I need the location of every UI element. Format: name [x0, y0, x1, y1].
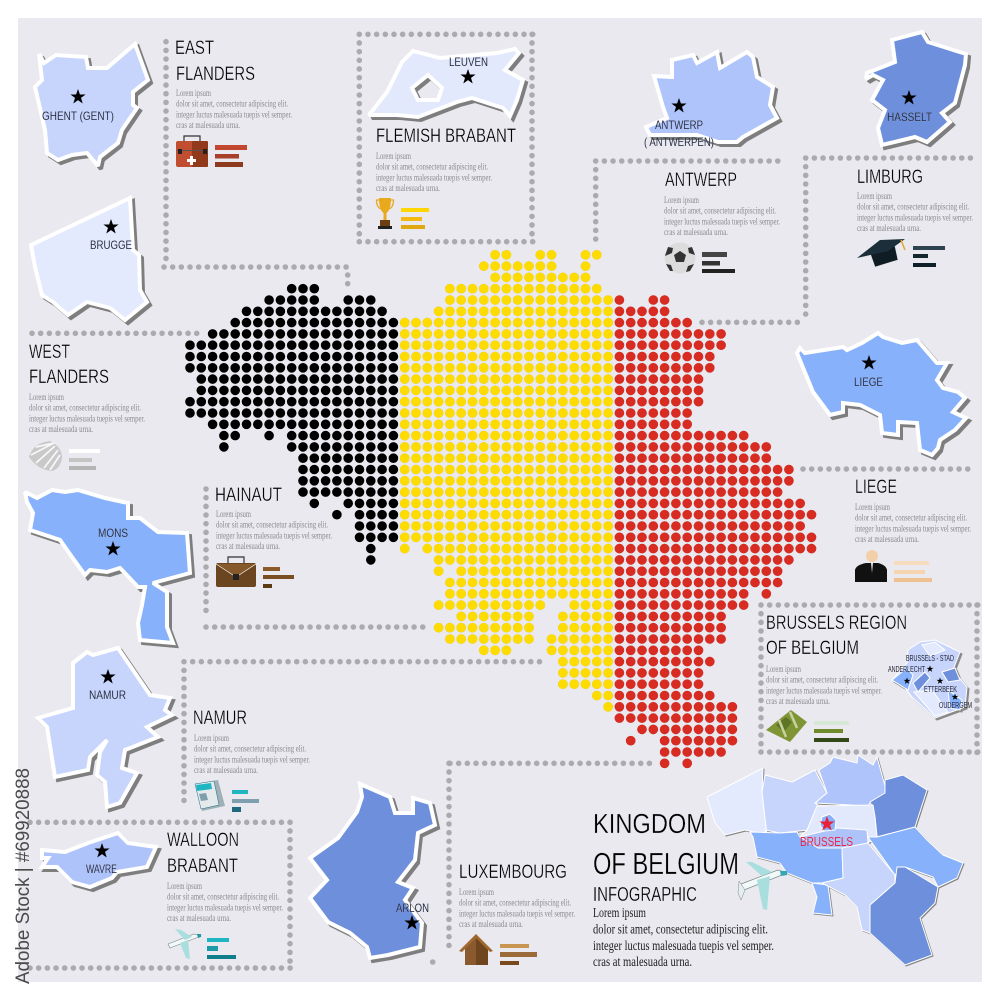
- bar legend: [215, 145, 247, 167]
- map: Brussels municipalities: ANDERLECHT: [888, 665, 925, 674]
- main title: OF BELGIUM: [593, 846, 739, 881]
- region: Walloon Brabant: [800, 828, 868, 857]
- text block: dolor sit amet, consectetur adipiscing elit.: [216, 520, 328, 531]
- region: East Flanders: [762, 770, 827, 835]
- main title: [593, 808, 739, 906]
- text block: Lorem ipsum: [216, 509, 251, 520]
- text block: integer luctus malesuada tuepis vel semper.: [29, 413, 145, 424]
- panel: Brussels Region: [766, 613, 972, 742]
- region: Hainaut: [750, 832, 843, 883]
- map: Luxembourg province with Arlon: ARLON: [396, 901, 429, 915]
- text block: cras at malesuada urna.: [176, 120, 240, 131]
- map: Brussels municipalities: ETTERBEEK: [924, 685, 957, 694]
- text block: dolor sit amet, consectetur adipiscing elit.: [664, 206, 776, 217]
- heading: WALLOON: [167, 830, 239, 851]
- map: Brussels municipalities: [888, 640, 972, 718]
- heading: FLANDERS: [176, 64, 255, 85]
- map: East Flanders province with Ghent: [35, 44, 148, 166]
- heading: OF BELGIUM: [766, 638, 859, 659]
- heading: LIEGE: [855, 477, 897, 498]
- heading: [766, 613, 907, 659]
- text block: Lorem ipsum: [664, 195, 699, 206]
- panel: Walloon Brabant: [167, 830, 283, 959]
- text block: Lorem ipsum: [855, 502, 890, 513]
- text block: Lorem ipsum: [194, 733, 229, 744]
- bar legend: [401, 208, 429, 229]
- heading: FLEMISH BRABANT: [376, 126, 516, 147]
- text block: Lorem ipsum: [857, 191, 892, 202]
- text block: cras at malesuada urna.: [376, 183, 440, 194]
- bar legend: [232, 790, 259, 812]
- icon: briefcase: [216, 557, 256, 587]
- map: Antwerp province: ANTWERP: [655, 118, 703, 132]
- map: Antwerp province: [644, 52, 777, 149]
- text block: dolor sit amet, consectetur adipiscing elit.: [29, 403, 141, 414]
- heading: BRABANT: [167, 856, 238, 877]
- panel: Flemish Brabant: [376, 126, 516, 229]
- black band of dots: [190, 289, 394, 560]
- heading: NAMUR: [193, 708, 247, 729]
- heading: [175, 38, 255, 85]
- heading: FLANDERS: [29, 367, 109, 388]
- text block: integer luctus malesuada tuepis vel semper.: [176, 109, 292, 120]
- region: Flemish Brabant: [800, 805, 877, 843]
- intro text: cras at malesuada urna.: [593, 955, 692, 970]
- heading: [167, 830, 239, 877]
- panel: Limburg: [857, 167, 973, 267]
- panel: Namur: [193, 708, 310, 812]
- intro text: Lorem ipsum: [593, 906, 646, 921]
- region: Antwerp: [815, 755, 887, 806]
- text block: dolor sit amet, consectetur adipiscing elit.: [766, 675, 878, 686]
- region: Limburg: [870, 775, 927, 837]
- text block: [29, 392, 145, 435]
- map: Flemish Brabant province with Leuven: LEUVEN: [449, 55, 488, 69]
- source credit: Adobe Stock | #69920888: [13, 768, 34, 984]
- text block: cras at malesuada urna.: [29, 424, 93, 435]
- map: Luxembourg province with Arlon: [310, 784, 435, 958]
- text block: [664, 195, 780, 238]
- map: West Flanders province with Brugge: BRUGGE: [90, 238, 132, 252]
- bar legend: [263, 567, 294, 588]
- map: Belgium provinces overview: [707, 755, 963, 965]
- text block: [216, 509, 332, 552]
- text block: dolor sit amet, consectetur adipiscing elit.: [376, 162, 488, 173]
- capital marker: Brussels: [800, 816, 853, 849]
- text block: [194, 733, 310, 776]
- panel: Luxembourg: [459, 862, 575, 965]
- icon: first aid bag: [176, 136, 208, 167]
- icon: newspaper: [195, 780, 225, 811]
- text block: [376, 151, 492, 194]
- map: East Flanders province with Ghent: GHENT (GENT): [42, 109, 114, 123]
- icon: football: [664, 242, 696, 274]
- main title: INFOGRAPHIC: [593, 884, 697, 906]
- map: Namur province: NAMUR: [89, 688, 126, 702]
- heading: [29, 342, 109, 388]
- map: Brussels municipalities: BRUSSELS - STAD: [906, 654, 954, 663]
- dot map of Belgium in flag colours: [190, 255, 812, 763]
- text block: integer luctus malesuada tuepis vel semper.: [459, 908, 575, 919]
- text block: [857, 191, 973, 234]
- bar legend: [500, 944, 537, 965]
- text block: Lorem ipsum: [376, 151, 411, 162]
- map: Liege province: LIEGE: [854, 375, 883, 389]
- text block: integer luctus malesuada tuepis vel semper.: [216, 530, 332, 541]
- bar legend: [814, 721, 849, 742]
- region: Liege: [868, 827, 963, 887]
- bar legend: [69, 449, 100, 470]
- text block: integer luctus malesuada tuepis vel semper.: [376, 172, 492, 183]
- panel: Antwerp: [664, 170, 780, 274]
- heading: LUXEMBOURG: [459, 862, 567, 883]
- bar legend: [702, 252, 735, 273]
- map: Flemish Brabant province with Leuven: [369, 49, 523, 117]
- text block: dolor sit amet, consectetur adipiscing elit.: [459, 898, 571, 909]
- icon: airplane: [168, 929, 201, 959]
- text block: integer luctus malesuada tuepis vel semper.: [766, 685, 882, 696]
- panel: West Flanders: [29, 342, 145, 471]
- region: West Flanders: [707, 768, 767, 835]
- heading: EAST: [175, 38, 214, 59]
- text block: cras at malesuada urna.: [664, 227, 728, 238]
- text block: [176, 88, 292, 131]
- bar legend: [913, 246, 945, 267]
- region: Luxembourg: [870, 867, 938, 965]
- text block: cras at malesuada urna.: [167, 913, 231, 924]
- heading: LIMBURG: [857, 167, 923, 188]
- region: Namur: [822, 843, 895, 933]
- text block: cras at malesuada urna.: [194, 765, 258, 776]
- icon: graduation cap: [857, 239, 905, 267]
- map: Limburg province with Hasselt: HASSELT: [887, 110, 933, 124]
- map: Namur province: [38, 648, 172, 807]
- text block: Lorem ipsum: [167, 881, 202, 892]
- icon: shell: [29, 441, 62, 471]
- map: Walloon Brabant province with Wavre: [42, 833, 156, 887]
- map: West Flanders province with Brugge: [31, 198, 147, 320]
- text block: Lorem ipsum: [29, 392, 64, 403]
- text block: Lorem ipsum: [766, 664, 801, 675]
- map: Hainaut province with Mons: MONS: [98, 526, 128, 540]
- text block: [855, 502, 971, 545]
- text block: [459, 887, 575, 930]
- intro text: [593, 906, 774, 970]
- text block: dolor sit amet, consectetur adipiscing elit.: [167, 892, 279, 903]
- map: Hainaut province with Mons: [25, 490, 190, 643]
- panel: Hainaut: [215, 485, 332, 588]
- heading: ANTWERP: [665, 170, 737, 191]
- text block: [766, 664, 882, 707]
- region: Hainaut south tongue: [812, 883, 832, 915]
- bar legend: [207, 938, 236, 959]
- map: Antwerp province: ( ANTWERPEN): [644, 135, 714, 149]
- icon: trophy: [376, 198, 394, 229]
- red band of dots: [619, 300, 812, 763]
- region: Brussels: [820, 814, 836, 831]
- yellow band of dots: [405, 255, 608, 707]
- intro text: dolor sit amet, consectetur adipiscing elit.: [593, 922, 768, 938]
- icon: banknotes: [766, 710, 807, 742]
- text block: dolor sit amet, consectetur adipiscing elit.: [194, 744, 306, 755]
- text block: integer luctus malesuada tuepis vel semper.: [194, 754, 310, 765]
- intro text: integer luctus malesuada tuepis vel semper.: [593, 939, 774, 954]
- text block: Lorem ipsum: [459, 887, 494, 898]
- text block: cras at malesuada urna.: [459, 919, 523, 930]
- text block: cras at malesuada urna.: [766, 696, 830, 707]
- icon: large airplane: [738, 862, 787, 910]
- panel: East Flanders: [175, 38, 292, 167]
- bar legend: [894, 561, 932, 582]
- map: Brussels municipalities: OUDERGEM: [939, 701, 972, 710]
- capital marker: Brussels: BRUSSELS: [800, 834, 853, 849]
- map: Limburg province with Hasselt: [866, 32, 966, 145]
- heading: WEST: [29, 342, 70, 363]
- text block: integer luctus malesuada tuepis vel semper.: [167, 902, 283, 913]
- map: Liege province: [797, 333, 966, 455]
- text block: cras at malesuada urna.: [855, 534, 919, 545]
- text block: [167, 881, 283, 924]
- heading: HAINAUT: [215, 485, 282, 506]
- text block: integer luctus malesuada tuepis vel semper.: [664, 216, 780, 227]
- text block: Lorem ipsum: [176, 88, 211, 99]
- icon: businessman: [855, 550, 887, 582]
- panel: Liege: [855, 477, 971, 582]
- text block: dolor sit amet, consectetur adipiscing elit.: [176, 99, 288, 110]
- text block: cras at malesuada urna.: [857, 223, 921, 234]
- main title: KINGDOM: [593, 808, 706, 839]
- heading: BRUSSELS REGION: [766, 613, 907, 634]
- icon: house: [459, 934, 493, 965]
- text block: cras at malesuada urna.: [216, 541, 280, 552]
- map: Walloon Brabant province with Wavre: WAVRE: [86, 862, 117, 876]
